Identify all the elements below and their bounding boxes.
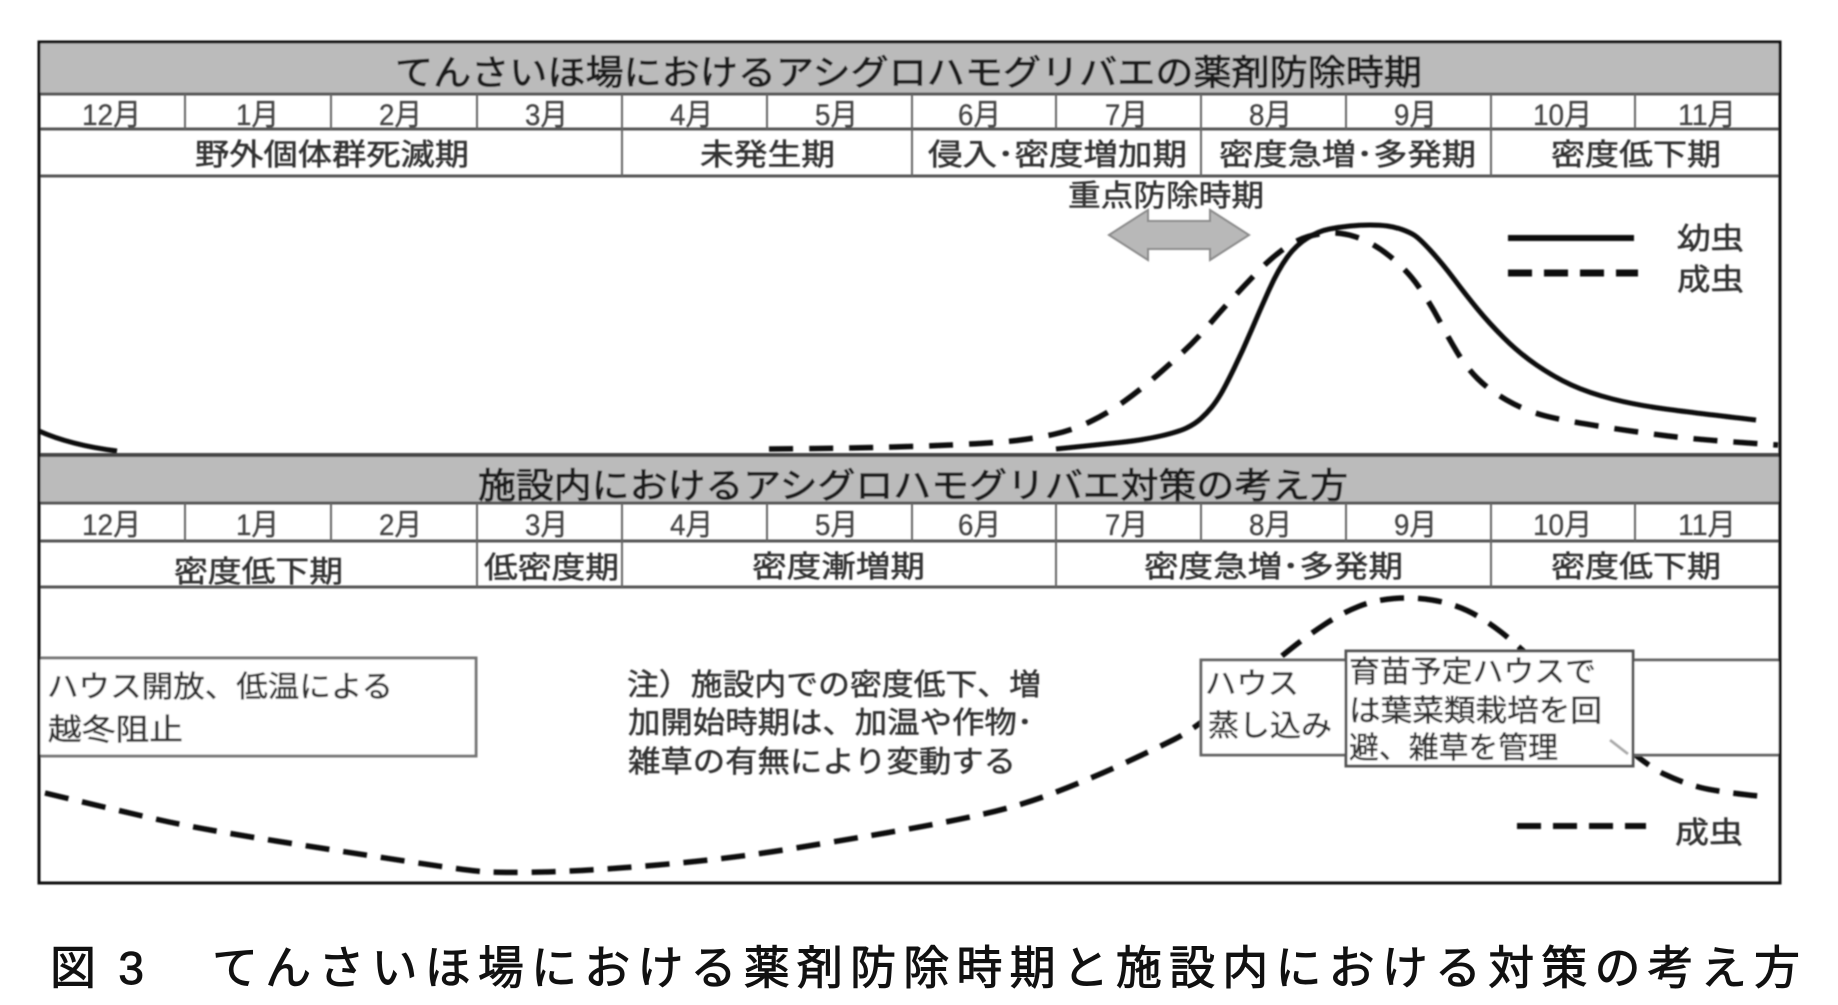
- heading band: field: てんさいほ場におけるアシグロハモグリバエの薬剤防除時期: [395, 54, 1422, 93]
- panel: greenhouse control approach: [39, 456, 1780, 872]
- month row: field: 8月: [1249, 99, 1292, 132]
- callout: house opening box: ハウス開放、低温による: [47, 671, 393, 704]
- month row: greenhouse: [39, 503, 1780, 542]
- heading band: greenhouse: 施設内におけるアシグロハモグリバエ対策の考え方: [478, 467, 1348, 506]
- callout: seedling house box: は葉菜類栽培を回: [1349, 695, 1602, 728]
- month row: field: 9月: [1394, 99, 1437, 132]
- curve: larvae solid line left tail: [39, 431, 117, 451]
- period row: field: [39, 129, 1780, 176]
- month row: greenhouse: 2月: [379, 509, 422, 542]
- month row: field: 3月: [525, 99, 568, 132]
- callout: house steaming box: [1201, 660, 1780, 755]
- legend: larvae and adults: 成虫: [1677, 264, 1744, 297]
- month row: field: 12月: [82, 99, 141, 132]
- month row: greenhouse: 11月: [1678, 509, 1736, 542]
- month row: greenhouse: 9月: [1394, 509, 1437, 542]
- month row: field: 11月: [1678, 99, 1736, 132]
- label: priority control period: 重点防除時期: [1068, 180, 1264, 213]
- period row: greenhouse: 密度漸増期: [752, 551, 925, 584]
- callout: seedling house box: 育苗予定ハウスで: [1349, 656, 1596, 689]
- month row: greenhouse: 1月: [236, 509, 279, 542]
- panel: field pesticide timing: [39, 42, 1780, 451]
- note: density change varies: 注）施設内での密度低下、増: [627, 669, 1041, 702]
- legend: larvae and adults: 幼虫: [1677, 223, 1744, 256]
- arrow: priority period double arrow: [1109, 210, 1249, 260]
- callout: seedling house box: 避、雑草を管理: [1349, 732, 1558, 765]
- month row: field: 5月: [815, 99, 858, 132]
- period row: field: 密度低下期: [1551, 139, 1721, 172]
- month row: greenhouse: 3月: [525, 509, 568, 542]
- callout: house opening box: [39, 658, 476, 756]
- month row: field: 10月: [1533, 99, 1592, 132]
- month row: greenhouse: 4月: [670, 509, 713, 542]
- heading band: field: [39, 42, 1780, 94]
- callout: house steaming box: 蒸し込み: [1208, 710, 1332, 743]
- month row: field: [39, 94, 1780, 132]
- note: density change varies: [627, 669, 1041, 779]
- month row: field: 1月: [236, 99, 279, 132]
- month row: field: 7月: [1105, 99, 1148, 132]
- period row: field: 侵入･密度増加期: [928, 139, 1187, 172]
- period row: greenhouse: 密度低下期: [1551, 551, 1721, 584]
- month row: greenhouse: 8月: [1249, 509, 1292, 542]
- legend: adults: 成虫: [1675, 817, 1743, 850]
- period row: greenhouse: 密度低下期: [174, 556, 343, 589]
- curve: adult dashed line: [769, 233, 1778, 449]
- month row: greenhouse: 7月: [1105, 509, 1148, 542]
- curve: greenhouse adult dashed line: [45, 598, 1768, 872]
- legend: larvae and adults: [1508, 223, 1744, 297]
- month row: greenhouse: 6月: [958, 509, 1001, 542]
- month row: field: 2月: [379, 99, 422, 132]
- figure caption: てんさいほ場における薬剤防除時期と施設内における対策の考え方: [212, 942, 1800, 994]
- month row: field: 6月: [958, 99, 1001, 132]
- callout: seedling house box: [1346, 651, 1633, 766]
- heading band: greenhouse: [39, 456, 1780, 506]
- callout: house steaming box: ハウス: [1205, 668, 1299, 701]
- period row: field: 未発生期: [700, 139, 835, 172]
- month row: greenhouse: 10月: [1533, 509, 1592, 542]
- chart frame with both panels: [39, 42, 1780, 883]
- curve: larvae solid line: [1056, 225, 1756, 449]
- period row: greenhouse: [39, 541, 1780, 589]
- outer frame border: [39, 42, 1780, 883]
- period row: field: 野外個体群死滅期: [195, 139, 469, 172]
- month row: greenhouse: 5月: [815, 509, 858, 542]
- month row: field: 4月: [670, 99, 713, 132]
- figure caption: 図 3: [50, 942, 144, 994]
- period row: field: 密度急増･多発期: [1219, 139, 1476, 172]
- callout: house opening box: 越冬阻止: [48, 714, 183, 747]
- note: density change varies: 加開始時期は、加温や作物･: [628, 707, 1033, 740]
- period row: greenhouse: 低密度期: [484, 552, 619, 585]
- note: density change varies: 雑草の有無により変動する: [628, 746, 1016, 779]
- month row: greenhouse: 12月: [82, 509, 141, 542]
- period row: greenhouse: 密度急増･多発期: [1144, 551, 1403, 584]
